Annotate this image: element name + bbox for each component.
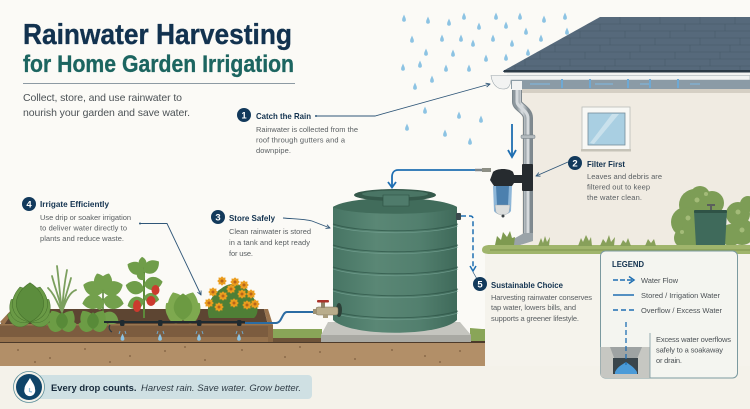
callout 2: Filter First [536, 156, 662, 202]
callout 3: Store Safely: for use. [229, 249, 253, 258]
callout 3: Store Safely [211, 210, 330, 258]
footer banner [14, 372, 312, 402]
bush and green barrel [671, 186, 750, 248]
concrete slab [321, 322, 471, 342]
callout 2: Filter First: 2 [572, 158, 578, 170]
callout 2: Filter First: filtered out to keep [587, 182, 650, 192]
callout 2: Filter First: the water clean. [587, 193, 642, 202]
callout 5: Sustainable Choice: Harvesting rainwater conserves [491, 293, 592, 302]
callout 3: Store Safely: 3 [215, 212, 221, 224]
callout 4: Irrigate Efficiently: Use drip or soaker irrigation [40, 213, 131, 222]
raised garden bed [0, 309, 273, 342]
window [581, 107, 631, 152]
soil [0, 341, 485, 366]
callout 4: Irrigate Efficiently: plants and reduce waste. [40, 234, 124, 243]
plant: seedling two [76, 307, 110, 334]
soakaway diagram [600, 322, 650, 378]
roof [500, 17, 750, 72]
callout 3: Store Safely: in a tank and kept ready [229, 238, 310, 247]
gutter [491, 72, 750, 93]
legend panel [600, 251, 738, 378]
callout 1: Catch the Rain: 1 [241, 110, 247, 122]
icon: water drop [14, 372, 44, 402]
subtitle: Collect, store, and use rainwater to [23, 92, 182, 104]
callout 4: Irrigate Efficiently [22, 197, 201, 295]
subtitle [23, 92, 190, 119]
footer banner: Every drop counts. [51, 383, 136, 394]
callout 5: Sustainable Choice: Sustainable Choice [491, 280, 563, 290]
callout 5: Sustainable Choice: tap water, lowers bills, and [491, 303, 576, 312]
legend note: safely to a soakaway [656, 346, 723, 354]
tank [333, 189, 461, 333]
plant: small seedling [45, 307, 79, 334]
plant: tomato with red fruit [124, 256, 164, 318]
callout 2: Filter First: Leaves and debris are [587, 172, 662, 181]
legend: overflow: Overflow / Excess Water [641, 306, 722, 315]
callout 4: Irrigate Efficiently: Irrigate Efficiently [40, 199, 109, 209]
callout 1: Catch the Rain: roof through gutters and a [256, 136, 346, 144]
overflow dashed pipe [461, 216, 476, 271]
small grass patches [273, 328, 485, 341]
callout 1: Catch the Rain [237, 84, 490, 155]
title [23, 19, 294, 78]
overflow outlet [456, 213, 461, 220]
grass strip [482, 235, 750, 254]
subtitle: nourish your garden and save water. [23, 107, 190, 119]
legend note: or drain. [656, 356, 682, 365]
footer banner: Harvest rain. Save water. Grow better. [141, 383, 301, 394]
plant: lettuce [160, 289, 206, 326]
tank lid [354, 189, 436, 206]
callout 4: Irrigate Efficiently: 4 [26, 200, 32, 210]
legend: water flow: Water Flow [641, 276, 679, 285]
callout 3: Store Safely: Store Safely [229, 213, 275, 223]
callout 1: Catch the Rain: Rainwater is collected from the [256, 125, 358, 134]
plant: herb [81, 271, 125, 328]
legend note [656, 335, 731, 365]
plant: spinach [3, 283, 57, 330]
plant: marigolds [204, 276, 260, 318]
callout 5: Sustainable Choice: supports a greener lifestyle. [491, 314, 579, 323]
callout 5: Sustainable Choice [473, 277, 592, 323]
title: for Home Garden Irrigation [23, 51, 294, 78]
legend panel: LEGEND [612, 260, 644, 269]
brass tap [313, 300, 342, 318]
arrow: down flow [508, 124, 516, 157]
small weed [495, 231, 515, 245]
legend note: Excess water overflows [656, 335, 731, 344]
callout 4: Irrigate Efficiently: to deliver water directly to [40, 224, 127, 232]
callout 1: Catch the Rain: Catch the Rain [256, 111, 311, 121]
downpipe [508, 81, 535, 247]
callout 3: Store Safely: Clean rainwater is stored [229, 227, 311, 236]
title: Rainwater Harvesting [23, 19, 292, 51]
filter unit [475, 164, 533, 218]
callout 2: Filter First: Filter First [587, 159, 625, 169]
blue pipe to tank [388, 170, 475, 188]
callout 5: Sustainable Choice: 5 [477, 280, 483, 290]
drip irrigation line [104, 312, 314, 341]
legend: stored water: Stored / Irrigation Water [641, 291, 720, 300]
house wall [522, 89, 750, 247]
callout 1: Catch the Rain: downpipe. [256, 146, 291, 155]
plant: onion grass [48, 266, 76, 312]
rain drops [401, 12, 569, 145]
